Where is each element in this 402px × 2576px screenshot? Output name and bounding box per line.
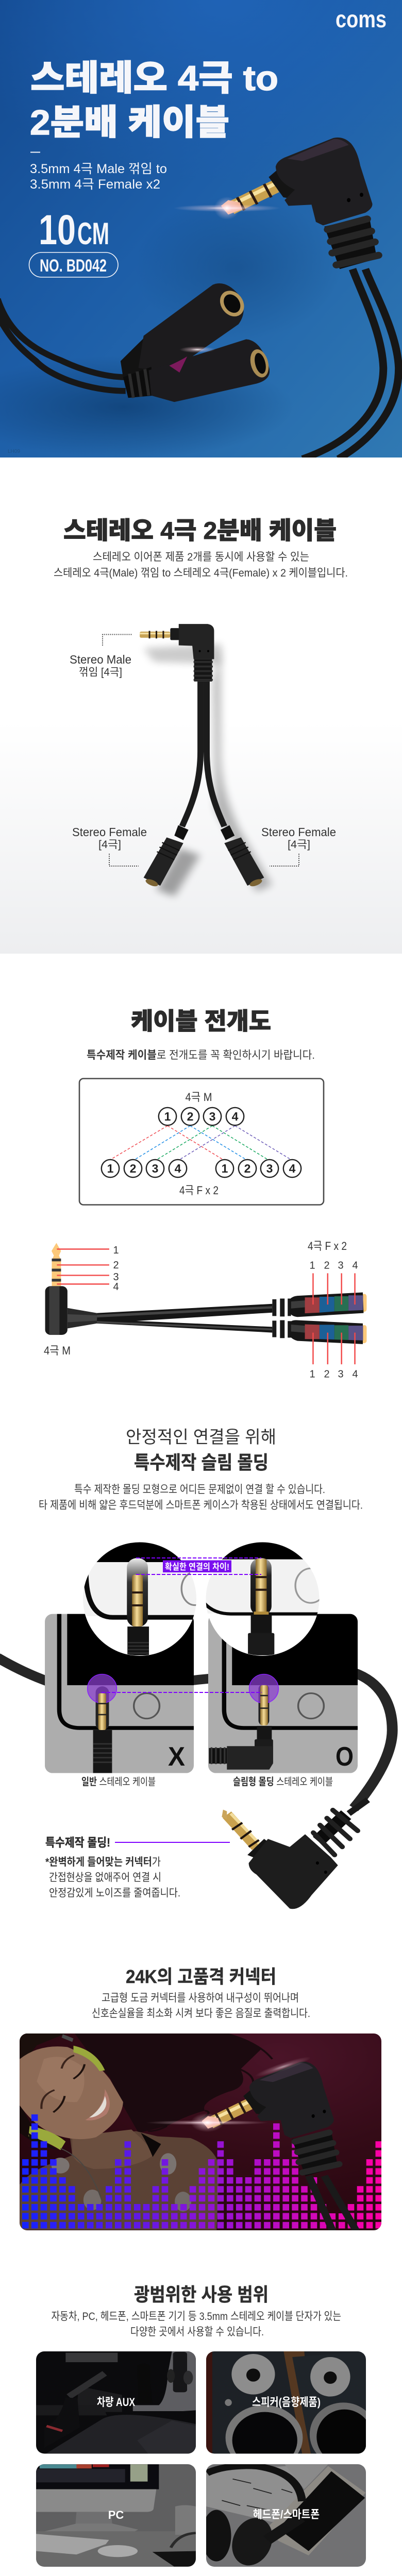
pin numbers: 1 <box>222 1162 228 1175</box>
connection difference callout: 확실한 연결의 차이! <box>165 1562 229 1572</box>
pin numbers: 4 <box>232 1110 239 1123</box>
pin circles <box>102 1108 301 1177</box>
hero subtitle: 3.5mm 4극 Male 꺾임 to <box>30 162 167 176</box>
usage description: 자동차, PC, 헤드폰, 스마트폰 기기 등 3.5mm 스테레오 케이블 단자가 있는 <box>52 2310 341 2323</box>
heading: for stable connection: 안정적인 연결을 위해 <box>126 1428 276 1447</box>
section: wide usage <box>36 2284 377 2568</box>
plug pin numbers <box>113 1245 119 1293</box>
label: female plug pins <box>308 1240 358 1380</box>
pin numbers: 3 <box>266 1162 273 1175</box>
panel: slim molded cable <box>208 1614 358 1773</box>
equalizer bars <box>25 2114 379 2231</box>
panel: car AUX <box>36 2351 196 2454</box>
pin numbers: 4 <box>175 1162 181 1175</box>
plug pin numbers: 3 <box>113 1272 119 1283</box>
label: female plug pins: 3 <box>338 1260 344 1272</box>
label: male plug: 4극 M <box>44 1344 71 1357</box>
heading: stereo 4-pole splitter: 스테레오 4극 2분배 케이블 <box>63 517 337 544</box>
hero subtitle: 3.5mm 4극 Female x2 <box>30 177 160 192</box>
right-angle plug photo <box>222 1800 368 1909</box>
label: female plug pins: 2 <box>324 1260 330 1272</box>
decorative cables <box>0 1657 392 1808</box>
heading: usage range: 광범위한 사용 범위 <box>134 2284 269 2305</box>
panel: headphones and smartphone <box>202 2464 366 2568</box>
pin numbers: 4 <box>289 1162 296 1175</box>
label: stereo female right: Stereo Female <box>261 825 336 839</box>
label: female plug pins: 1 <box>309 1368 315 1380</box>
hero product photo: angled splitter cable <box>0 138 399 459</box>
length label: CM <box>77 216 109 251</box>
label: stereo female left <box>72 825 147 866</box>
phone comparison <box>0 1539 392 1808</box>
wiring box <box>79 1079 324 1205</box>
pin numbers: 2 <box>130 1162 136 1175</box>
label: 4-pole male: 4극 M <box>186 1091 212 1104</box>
label: stereo male: Stereo Male <box>70 653 131 666</box>
model number pill: NO. BD042 <box>40 256 107 276</box>
plug pin numbers: 1 <box>113 1245 119 1256</box>
overview description: 스테레오 이어폰 제품 2개를 동시에 사용할 수 있는 <box>93 551 309 563</box>
hero title: 2분배 케이블 <box>30 103 229 142</box>
label: stereo female left: Stereo Female <box>72 825 147 839</box>
brand logo: coms <box>336 6 387 32</box>
plug height guide <box>102 1692 262 1693</box>
overview description: 스테레오 4극(Male) 꺾임 to 스테레오 4극(Female) x 2 케이블입니다. <box>54 567 348 579</box>
label: female plug pins: 2 <box>324 1368 330 1380</box>
24K description: 신호손실율을 최소화 시켜 보다 좋은 음질로 출력합니다. <box>92 2007 310 2020</box>
hero dash <box>30 151 40 152</box>
callout: special molding: 특수제작 몰딩! <box>45 1836 110 1849</box>
label: stereo female left: [4극] <box>98 839 121 851</box>
callout: special molding: 안정감있게 노이즈를 줄여줍니다. <box>49 1887 180 1899</box>
usage description: 다양한 곳에서 사용할 수 있습니다. <box>130 2326 264 2338</box>
pin numbers: 1 <box>164 1110 171 1123</box>
label: female plug pins: 1 <box>309 1260 315 1272</box>
O mark: O <box>336 1742 354 1772</box>
magnifier: slim plug <box>206 1543 320 1656</box>
hero panel <box>0 0 402 459</box>
section: wiring diagram <box>44 1008 366 1380</box>
usage description <box>52 2310 341 2338</box>
slim molding description <box>39 1483 363 1512</box>
24K description: 고급형 도금 커넥터를 사용하여 내구성이 뛰어나며 <box>102 1992 299 2004</box>
cable pin illustration <box>45 1243 366 1364</box>
label: car AUX: 차량 AUX <box>97 2396 135 2409</box>
pin numbers: 2 <box>187 1110 193 1123</box>
caption: ordinary cable: 일반 스테레오 케이블 <box>81 1776 156 1788</box>
plug pin numbers: 2 <box>113 1260 119 1271</box>
X mark: X <box>168 1742 185 1772</box>
24K description <box>92 1992 310 2020</box>
product photo: Y cable <box>140 624 272 896</box>
callout: special molding: 간접현상을 없애주어 연결 시 <box>49 1872 161 1884</box>
label: stereo male <box>70 635 132 678</box>
panel: PC <box>36 2464 196 2567</box>
length label: 10 <box>39 207 76 253</box>
section: product overview <box>0 517 402 954</box>
magnifier: ordinary plug <box>83 1543 196 1656</box>
label: speakers: 스피커(음향제품) <box>252 2396 321 2409</box>
caption: slim molded cable: 슬림형 몰딩 스테레오 케이블 <box>233 1776 333 1788</box>
callout: special molding: *완벽하게 들어맞는 커넥터가 <box>45 1856 161 1868</box>
image code: LH09 <box>8 449 20 454</box>
pin numbers: 1 <box>107 1162 114 1175</box>
pin numbers: 2 <box>244 1162 250 1175</box>
overview description <box>54 551 348 579</box>
pin numbers: 3 <box>152 1162 158 1175</box>
panel: speakers <box>206 2351 366 2453</box>
length label <box>41 215 108 245</box>
model number pill <box>29 252 118 277</box>
label: stereo male: 꺾임 [4극] <box>79 667 122 678</box>
dashed wires <box>110 1126 291 1160</box>
pin numbers <box>107 1110 296 1175</box>
wiring note: 특수제작 케이블로 전개도를 꼭 확인하시기 바랍니다. <box>87 1049 315 1061</box>
label: female plug pins: 3 <box>338 1368 344 1380</box>
hero subtitle <box>30 162 167 192</box>
label: 4-pole female x2: 4극 F x 2 <box>179 1184 219 1197</box>
connection difference callout <box>136 1558 261 1574</box>
hero title <box>30 59 278 142</box>
label: female plug pins: 4 <box>352 1368 358 1380</box>
section: slim molding <box>0 1428 402 2576</box>
panel: ordinary cable <box>45 1614 194 1773</box>
slim molding description: 특수 제작한 몰딩 모형으로 어디든 문제없이 연결 할 수 있습니다. <box>74 1483 325 1496</box>
plug pin numbers: 4 <box>113 1281 119 1293</box>
label: stereo female right <box>261 825 336 866</box>
pin numbers: 3 <box>209 1110 215 1123</box>
label: headphones and smartphone: 헤드폰/스마트폰 <box>253 2508 320 2521</box>
section: 24K connector <box>20 1966 381 2231</box>
heading: 24K connector: 24K의 고품격 커넥터 <box>126 1966 276 1987</box>
callout: special molding <box>45 1836 230 1899</box>
music listening photo <box>20 2033 381 2231</box>
label: female plug pins: 4 <box>352 1260 358 1272</box>
label: female plug pins: 4극 F x 2 <box>308 1240 347 1252</box>
heading: cable wiring: 케이블 전개도 <box>131 1008 271 1035</box>
heading: slim molding: 특수제작 슬림 몰딩 <box>134 1452 269 1473</box>
hero title: 스테레오 4극 to <box>30 59 278 98</box>
label: PC: PC <box>108 2509 124 2521</box>
label: stereo female right: [4극] <box>288 839 310 851</box>
